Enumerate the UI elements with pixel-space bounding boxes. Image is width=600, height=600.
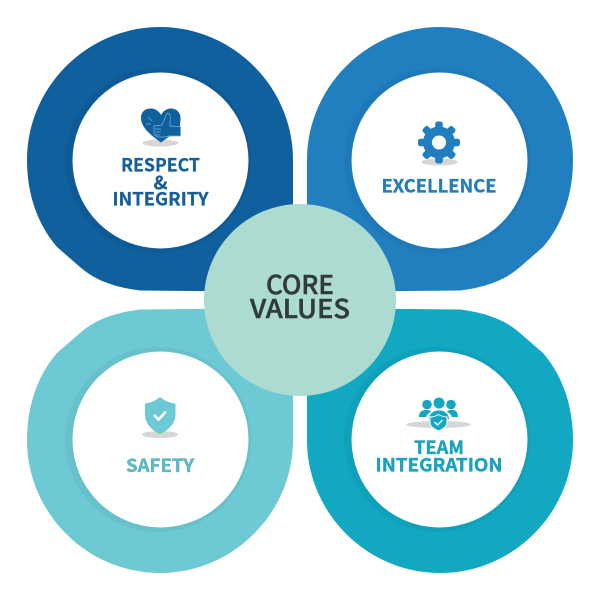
label: team integration <box>376 434 502 478</box>
label: team integration: INTEGRATION <box>376 452 502 478</box>
heading: core values <box>249 265 350 326</box>
icon: team with shield <box>406 398 471 431</box>
ring shape: excellence <box>307 27 573 292</box>
icon: gear <box>418 122 460 166</box>
label: respect and integrity: & <box>153 168 168 196</box>
heading: core values: CORE <box>266 265 334 302</box>
label: respect and integrity: RESPECT <box>121 152 200 178</box>
ring shape: team integration <box>307 308 573 573</box>
ring shape: safety <box>27 308 293 573</box>
ring shape: respect <box>27 27 293 292</box>
panel: team integration <box>307 308 573 573</box>
hub circle <box>204 204 396 396</box>
panel: safety <box>27 308 293 573</box>
panel: core values hub <box>204 204 396 396</box>
label: excellence: EXCELLENCE <box>382 172 496 198</box>
icon: shield with check <box>142 397 178 438</box>
icon: heart with thumbs up <box>141 108 180 146</box>
panel: respect and integrity <box>27 27 293 292</box>
panel: excellence <box>307 27 573 292</box>
label: respect and integrity: INTEGRITY <box>112 186 209 212</box>
label: safety: SAFETY <box>126 452 195 478</box>
heading: core values: VALUES <box>249 289 350 326</box>
label: team integration: TEAM <box>414 434 464 460</box>
label: respect and integrity <box>112 152 209 212</box>
